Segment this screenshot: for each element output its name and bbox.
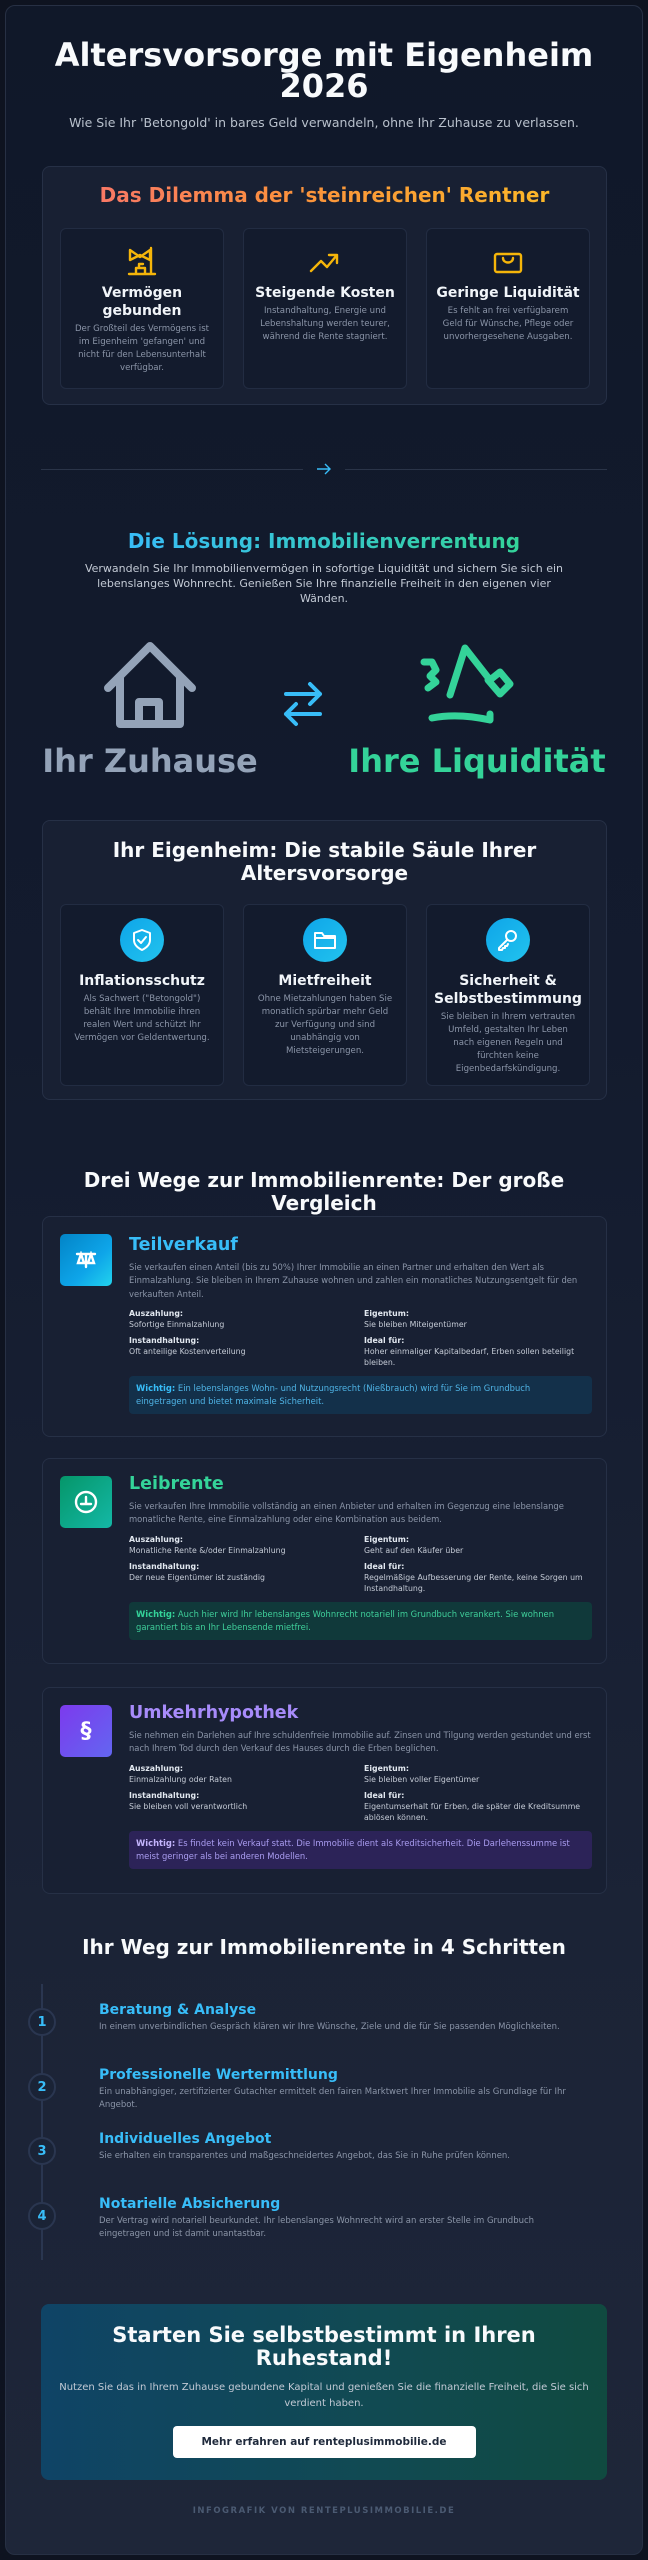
icon: Teilverkauf bbox=[60, 1234, 112, 1286]
step 3: Sie erhalten ein transparentes und maßgeschneidertes Angebot, das Sie in Ruhe prüfen können. bbox=[99, 2151, 510, 2161]
step 4: Der Vertrag wird notariell beurkundet. Ihr lebenslanges Wohnrecht wird an erster Stelle im Grundbuch eingetragen und ist damit unantastbar. bbox=[99, 2216, 534, 2239]
card: Mietfreiheit: zur Verfügung und sind bbox=[275, 1020, 375, 1030]
card: Mietfreiheit: unabhängig von bbox=[290, 1033, 360, 1043]
card: Teilverkauf: Hoher einmaliger Kapitalbedarf, Erben sollen beteiligt bleiben. bbox=[364, 1347, 574, 1367]
card: Vermögen gebunden: verfügbar. bbox=[120, 363, 164, 373]
card: Inflationsschutz: Inflationsschutz bbox=[79, 973, 205, 989]
card: Teilverkauf: Eigentum: bbox=[364, 1309, 409, 1318]
step 2: Professionelle Wertermittlung bbox=[99, 2067, 338, 2083]
label: Ihre Liquidität: Ihre Liquidität bbox=[348, 742, 606, 780]
card: Teilverkauf: Wichtig: Ein lebenslanges Wohn- und Nutzungsrecht (Nießbrauch) wird für Sie im Grundbuch bbox=[136, 1383, 530, 1393]
title: 2026 bbox=[279, 67, 369, 105]
card: Leibrente: Ideal für: bbox=[364, 1562, 404, 1571]
card: Sicherheit: Sicherheit & bbox=[459, 973, 557, 989]
card: Steigende Kosten: Instandhaltung, Energie und bbox=[264, 306, 386, 316]
card: Vermögen gebunden: im Eigenheim 'gefangen' und bbox=[79, 337, 205, 347]
card: Sicherheit: nach eigenen Regeln und bbox=[453, 1038, 563, 1048]
card: Steigende Kosten: Lebenshaltung werden teurer, bbox=[260, 319, 390, 329]
CTA button bbox=[172, 2426, 476, 2458]
card: Inflationsschutz: behält Ihre Immobilie ihren bbox=[84, 1007, 200, 1017]
icon: money bbox=[420, 644, 514, 724]
card: Leibrente: Leibrente bbox=[129, 1474, 224, 1494]
step 4: Notarielle Absicherung bbox=[99, 2196, 280, 2212]
step 1 bbox=[28, 2002, 560, 2036]
card: Sicherheit: Eigenbedarfskündigung. bbox=[456, 1064, 560, 1074]
title bbox=[54, 36, 593, 105]
card: Geringe Liquidität bbox=[426, 228, 590, 389]
heading: drei wege: Drei Wege zur Immobilienrente: Der große bbox=[84, 1168, 564, 1192]
step 3 bbox=[28, 2131, 510, 2165]
timeline: steps bbox=[28, 1984, 566, 2260]
icon: Umkehrhypothek bbox=[60, 1705, 112, 1757]
card: Mietfreiheit: Mietfreiheit bbox=[278, 973, 372, 989]
CTA button: Mehr erfahren auf renteplusimmobilie.de bbox=[201, 2436, 447, 2448]
CTA heading: Ruhestand! bbox=[256, 2346, 392, 2370]
step 4 bbox=[28, 2196, 534, 2239]
card: Leibrente: Regelmäßige Aufbesserung der Rente, keine Sorgen um Instandhaltung. bbox=[364, 1573, 583, 1593]
icon: trend up bbox=[310, 254, 338, 272]
card: Teilverkauf: Oft anteilige Kostenverteilung bbox=[129, 1347, 246, 1356]
card: Geringe Liquidität: Es fehlt an frei verfügbarem bbox=[448, 306, 568, 316]
icon: shield bbox=[120, 918, 164, 962]
icon: tied asset bbox=[128, 246, 156, 276]
card: Sicherheit: fürchten keine bbox=[477, 1051, 539, 1061]
card: Leibrente bbox=[42, 1458, 607, 1664]
card: Geringe Liquidität: unvorhergesehene Ausgaben. bbox=[444, 332, 572, 342]
card: Vermögen gebunden bbox=[60, 228, 224, 389]
icon: wallet bbox=[494, 252, 522, 274]
heading: dilemma: Das Dilemma der 'steinreichen' Rentner bbox=[100, 183, 549, 207]
card: Mietfreiheit bbox=[243, 904, 407, 1086]
card: Vermögen gebunden: Vermögen bbox=[102, 285, 182, 301]
card: Umkehrhypothek: Eigentum: bbox=[364, 1764, 409, 1773]
step 2: 2 bbox=[37, 2080, 47, 2094]
card: Mietfreiheit: Ohne Mietzahlungen haben Sie bbox=[258, 994, 392, 1004]
card: Umkehrhypothek: Instandhaltung: bbox=[129, 1791, 199, 1800]
CTA panel bbox=[41, 2304, 607, 2480]
card: Leibrente: Der neue Eigentümer ist zuständig bbox=[129, 1573, 265, 1582]
card: Leibrente: Eigentum: bbox=[364, 1535, 409, 1544]
card: Umkehrhypothek: Sie nehmen ein Darlehen auf Ihre schuldenfreie Immobilie auf. Zinsen und Tilgung werden gestundet und erst nach Ihrem Tod durch den Verkauf des Hauses durch die Erben beglichen. bbox=[129, 1730, 591, 1753]
step 3: 3 bbox=[37, 2144, 47, 2158]
card: Mietfreiheit: monatlich spürbar mehr Geld bbox=[262, 1007, 388, 1017]
card: Sicherheit: Sie bleiben in Ihrem vertrauten bbox=[441, 1012, 575, 1022]
step 4: 4 bbox=[37, 2208, 47, 2224]
card: Leibrente: Wichtig: Auch hier wird Ihr lebenslanges Wohnrecht notariell im Grundbuch verankert. Sie wohnen garantiert bis an Ihr Lebensende mietfrei. bbox=[136, 1609, 554, 1632]
heading: drei wege bbox=[84, 1168, 564, 1215]
card: Geringe Liquidität: Geringe Liquidität bbox=[436, 285, 580, 301]
heading: solution: Die Lösung: Immobilienverrentung bbox=[128, 529, 520, 553]
step 3: Individuelles Angebot bbox=[99, 2131, 271, 2147]
card: Teilverkauf: Sie verkaufen einen Anteil (bis zu 50%) Ihrer Immobilie an einen Partner und erhalten den Wert als Einmalzahlung. Sie bleiben in Ihrem Zuhause wohnen und zahlen ein monatliches Nutzungsentgelt für den verkauften Anteil. bbox=[129, 1262, 577, 1299]
card: Sicherheit: Selbstbestimmung bbox=[434, 991, 582, 1007]
panel: dilemma bbox=[42, 166, 607, 405]
card: Geringe Liquidität: Geld für Wünsche, Pflege oder bbox=[443, 319, 573, 329]
heading: pillar bbox=[113, 838, 536, 885]
icon: house bbox=[104, 642, 196, 728]
card: Umkehrhypothek: Einmalzahlung oder Raten bbox=[129, 1775, 232, 1784]
card: Vermögen gebunden: nicht für den Lebensunterhalt bbox=[78, 350, 206, 360]
card: Vermögen gebunden: Der Großteil des Vermögens ist bbox=[75, 324, 209, 334]
step 2: Ein unabhängiger, zertifizierter Gutachter ermittelt den fairen Marktwert Ihrer Immobilie als Grundlage für Ihr Angebot. bbox=[99, 2087, 566, 2110]
CTA text: Nutzen Sie das in Ihrem Zuhause gebundene Kapital und genießen Sie die finanzielle Freiheit, die Sie sich verdient haben. bbox=[59, 2382, 589, 2408]
step 1: In einem unverbindlichen Gespräch klären wir Ihre Wünsche, Ziele und die für Sie passenden Möglichkeiten. bbox=[99, 2022, 560, 2032]
card: Umkehrhypothek: Eigentumserhalt für Erben, die später die Kreditsumme ablösen können. bbox=[364, 1802, 580, 1822]
card: Teilverkauf bbox=[42, 1216, 607, 1437]
heading: pillar: Altersvorsorge bbox=[241, 861, 408, 885]
card: Inflationsschutz: Vermögen vor Geldentwertung. bbox=[74, 1033, 210, 1043]
card: Teilverkauf: eingetragen und bietet maximale Sicherheit. bbox=[136, 1396, 324, 1406]
card: Steigende Kosten bbox=[243, 228, 407, 389]
icon: Leibrente bbox=[60, 1476, 112, 1528]
card: Umkehrhypothek: Umkehrhypothek bbox=[129, 1703, 298, 1723]
panel: Eigenheim Säule bbox=[42, 820, 607, 1100]
card: Umkehrhypothek: Wichtig: Es findet kein Verkauf statt. Die Immobilie dient als Kreditsicherheit. Die Darlehenssumme ist meist geringer als bei anderen Modellen. bbox=[136, 1838, 570, 1861]
heading: 4 Schritte: Ihr Weg zur Immobilienrente in 4 Schritten bbox=[82, 1935, 566, 1959]
card: Steigende Kosten: während die Rente stagniert. bbox=[263, 332, 387, 342]
card: Sicherheit: Umfeld, gestalten Ihr Leben bbox=[448, 1025, 568, 1035]
card: Teilverkauf: Ideal für: bbox=[364, 1336, 404, 1345]
card: Umkehrhypothek: Sie bleiben voller Eigentümer bbox=[364, 1775, 479, 1784]
card: Teilverkauf: Teilverkauf bbox=[129, 1235, 238, 1255]
card: Leibrente: Monatliche Rente &/oder Einmalzahlung bbox=[129, 1546, 286, 1555]
CTA heading: Starten Sie selbstbestimmt in Ihren bbox=[112, 2323, 536, 2347]
card: Inflationsschutz: Als Sachwert ("Betongold") bbox=[84, 994, 200, 1004]
card: Steigende Kosten: Steigende Kosten bbox=[255, 285, 395, 301]
card: Leibrente: Sie verkaufen Ihre Immobilie vollständig an einen Anbieter und erhalten im Gegenzug eine lebenslange monatliche Rente, eine Einmalzahlung oder eine Kombination aus beidem. bbox=[129, 1501, 564, 1524]
heading: pillar: Ihr Eigenheim: Die stabile Säule Ihrer bbox=[113, 838, 536, 862]
card: Teilverkauf: Instandhaltung: bbox=[129, 1336, 199, 1345]
card: Umkehrhypothek: Sie bleiben voll verantwortlich bbox=[129, 1802, 247, 1811]
card: Umkehrhypothek: Ideal für: bbox=[364, 1791, 404, 1800]
icon: exchange arrows bbox=[284, 682, 322, 726]
icon: key bbox=[486, 918, 530, 962]
card: Teilverkauf: Sie bleiben Miteigentümer bbox=[364, 1320, 467, 1329]
card: Teilverkauf: Sofortige Einmalzahlung bbox=[129, 1320, 224, 1329]
card: Umkehrhypothek: Auszahlung: bbox=[129, 1764, 183, 1773]
card: Teilverkauf: Auszahlung: bbox=[129, 1309, 183, 1318]
icon: folder bbox=[303, 918, 347, 962]
card: Sicherheit bbox=[426, 904, 590, 1086]
card: Vermögen gebunden: gebunden bbox=[103, 303, 181, 319]
label: Ihr Zuhause: Ihr Zuhause bbox=[42, 742, 258, 780]
footer: INFOGRAFIK VON RENTEPLUSIMMOBILIE.DE bbox=[193, 2506, 455, 2516]
heading: drei wege: Vergleich bbox=[271, 1191, 377, 1215]
card: Inflationsschutz: realen Wert und schützt Ihr bbox=[83, 1020, 201, 1030]
card: Leibrente: Instandhaltung: bbox=[129, 1562, 199, 1571]
icon: Umkehrhypothek: § bbox=[80, 1718, 92, 1744]
card: Mietfreiheit: Mietsteigerungen. bbox=[286, 1046, 364, 1056]
subtitle: Wie Sie Ihr 'Betongold' in bares Geld verwandeln, ohne Ihr Zuhause zu verlassen. bbox=[69, 115, 579, 130]
divider with arrow bbox=[41, 464, 607, 474]
step 1: Beratung & Analyse bbox=[99, 2002, 256, 2018]
CTA heading bbox=[112, 2323, 536, 2370]
card: Leibrente: Geht auf den Käufer über bbox=[364, 1546, 463, 1555]
step 2 bbox=[28, 2067, 566, 2110]
step 1: 1 bbox=[37, 2014, 47, 2030]
text: solution: Verwandeln Sie Ihr Immobilienvermögen in sofortige Liquidität und sichern Sie sich ein lebenslanges Wohnrecht. Genießen Sie Ihre finanzielle Freiheit in den eigenen vier Wänden. bbox=[85, 562, 563, 605]
card: Inflationsschutz bbox=[60, 904, 224, 1086]
card: Leibrente: Auszahlung: bbox=[129, 1535, 183, 1544]
card: Umkehrhypothek bbox=[42, 1687, 607, 1894]
title: Altersvorsorge mit Eigenheim bbox=[55, 36, 593, 74]
